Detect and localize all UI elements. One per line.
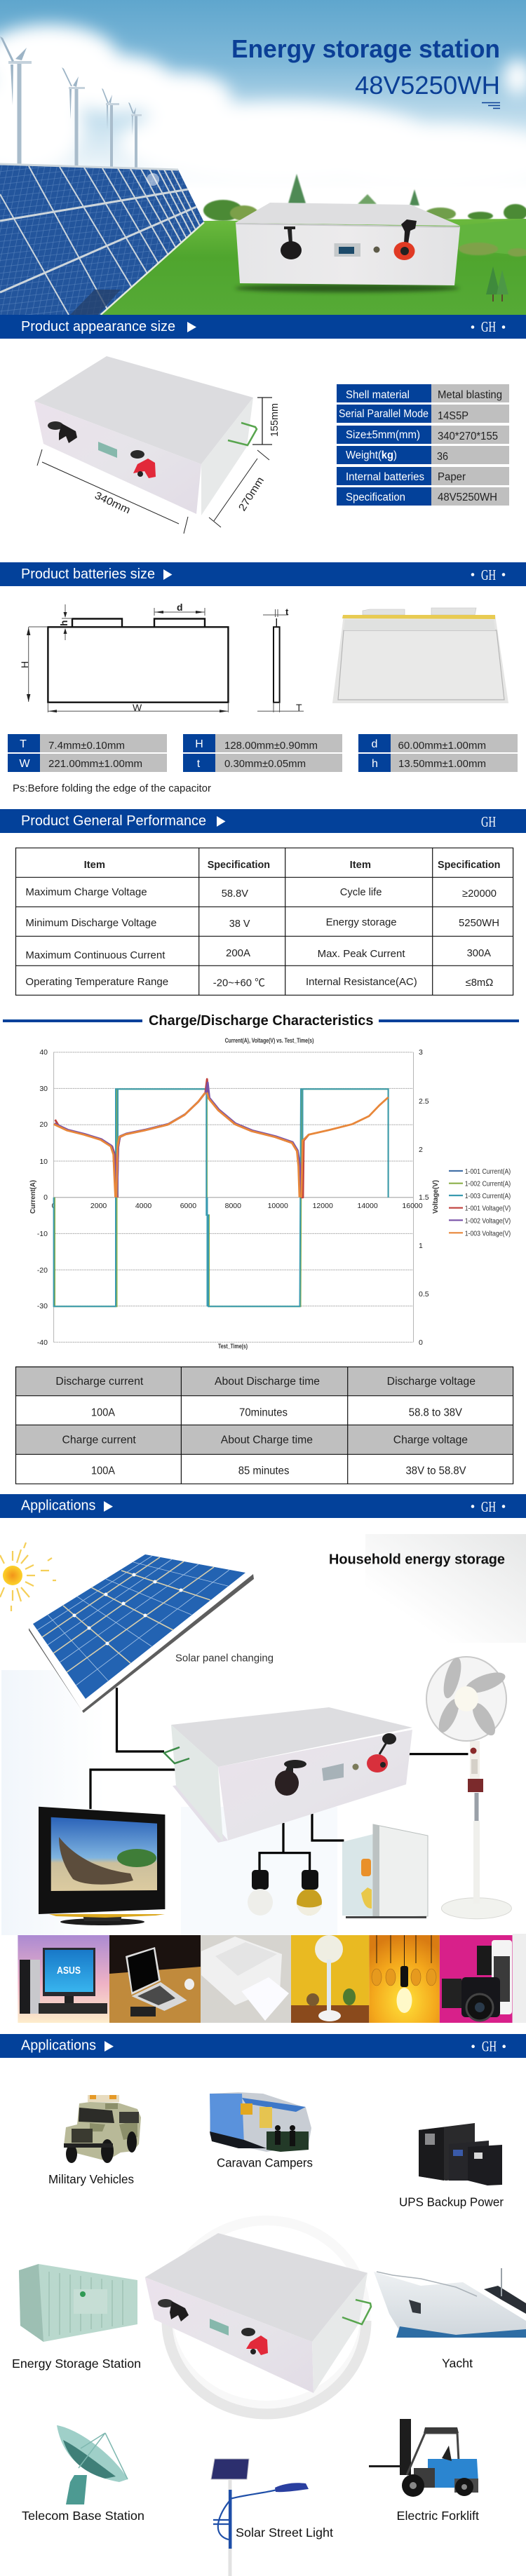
right axis: 2 xyxy=(419,1146,423,1154)
handle xyxy=(228,423,257,445)
chart legend: 1-002 Current(A) xyxy=(465,1180,511,1188)
photo: camera and phones xyxy=(440,1935,513,2023)
photo: laptop on desk xyxy=(109,1935,201,2023)
chart legend: 1-002 Voltage(V) xyxy=(465,1216,511,1225)
heading: Household energy storage xyxy=(329,1552,505,1568)
panel: household energy storage xyxy=(0,1534,526,2023)
heading: charge discharge: Charge/Discharge Characteristics xyxy=(149,1012,373,1029)
decorative lines icon xyxy=(482,102,500,108)
x axis labels: 10000 xyxy=(268,1202,288,1210)
dimension lines xyxy=(37,398,272,534)
left connector xyxy=(48,421,77,443)
solar panel xyxy=(29,1554,254,1713)
tv screen xyxy=(51,1817,157,1891)
dimension table: h xyxy=(372,758,378,770)
section banner: applications 2: Applications xyxy=(21,2038,96,2053)
white bulb xyxy=(248,1870,273,1916)
x axis labels xyxy=(52,1202,423,1210)
charge time table: Charge voltage xyxy=(393,1434,468,1446)
label: telecom base station: Telecom Base Station xyxy=(22,2509,144,2523)
performance table: ≤8mΩ xyxy=(466,977,493,989)
center battery xyxy=(145,2233,371,2393)
label: solar street light: Solar Street Light xyxy=(236,2526,333,2540)
section banner: batteries size xyxy=(0,562,526,586)
cell photo xyxy=(332,608,508,703)
performance table: Max. Peak Current xyxy=(318,948,405,960)
section banner: applications: GH xyxy=(481,1498,496,1515)
section banner: appearance size xyxy=(0,315,526,339)
performance table: 200A xyxy=(226,947,250,959)
panel nodes xyxy=(73,1573,182,1645)
left black connector xyxy=(281,226,302,259)
label T: T xyxy=(296,702,302,713)
x axis labels: 12000 xyxy=(313,1202,333,1210)
yellow bulb xyxy=(297,1870,322,1916)
cabinet top xyxy=(235,203,460,226)
x axis labels: 14000 xyxy=(357,1202,378,1210)
black connector xyxy=(158,2299,189,2321)
dimension table: 128.00mm±0.90mm xyxy=(224,740,318,752)
section banner: general performance: GH xyxy=(481,813,496,830)
television xyxy=(39,1807,165,1925)
pole and base xyxy=(441,1741,511,1919)
charge time table: 58.8 to 38V xyxy=(409,1406,463,1418)
fridge interior xyxy=(342,1834,373,1916)
left axis: 0 xyxy=(43,1193,48,1202)
right axis: 1.5 xyxy=(419,1193,429,1202)
x axis labels: 2000 xyxy=(90,1202,107,1210)
right axis: 0.5 xyxy=(419,1290,429,1299)
note: Ps:Before folding the edge of the capacitor xyxy=(13,782,211,794)
spec table: product: Specification xyxy=(346,492,405,503)
red connector xyxy=(394,219,417,260)
label: electric forklift: Electric Forklift xyxy=(397,2509,479,2523)
label h: h xyxy=(58,620,69,626)
panel surface xyxy=(33,1554,245,1699)
distant hill xyxy=(456,219,526,256)
sun icon xyxy=(0,1543,56,1611)
grass field xyxy=(100,219,526,315)
spec table: product: 14S5P xyxy=(438,410,468,422)
performance table: Operating Temperature Range xyxy=(25,976,168,988)
charge time table: 100A xyxy=(91,1465,116,1477)
label H: H xyxy=(19,661,30,668)
bottom flange xyxy=(173,1784,228,1843)
bushes on hill xyxy=(459,243,526,257)
panel grid xyxy=(37,1556,229,1686)
dimension table: T xyxy=(20,738,27,750)
charge time table: 85 minutes xyxy=(238,1465,290,1477)
panel frame xyxy=(29,1554,254,1713)
dimension table: 221.00mm±1.00mm xyxy=(48,759,142,770)
section banner: general performance xyxy=(0,809,526,833)
cell front diagram xyxy=(19,602,228,713)
section banner: batteries size: Product batteries size xyxy=(21,567,155,582)
tv neck xyxy=(83,1914,122,1921)
label t: t xyxy=(285,606,289,617)
label: ups backup power: UPS Backup Power xyxy=(399,2195,504,2209)
right axis: 2.5 xyxy=(419,1097,429,1106)
charge time table: Discharge current xyxy=(55,1376,144,1388)
section banner: applications: Applications xyxy=(21,1498,95,1513)
product photo with dimensions xyxy=(34,356,281,534)
spec table: product: Serial Parallel Mode xyxy=(339,408,429,420)
small trees xyxy=(486,266,508,301)
mini fridge xyxy=(342,1824,428,1918)
sky background xyxy=(0,0,526,315)
photo strip xyxy=(18,1934,526,2023)
box right side xyxy=(201,398,253,515)
left axis xyxy=(37,1048,48,1347)
label 270mm: 270mm xyxy=(236,475,267,513)
x axis labels: 16000 xyxy=(402,1202,423,1210)
ring behind battery xyxy=(167,2221,366,2414)
dimension table: H xyxy=(195,738,203,750)
photo: desktop computer: ASUS xyxy=(57,1965,81,1977)
grey corner backdrop xyxy=(365,1534,526,1643)
energy storage container xyxy=(19,2264,137,2342)
label: energy storage station: Energy Storage Station xyxy=(12,2357,141,2371)
photo: fan in yellow room xyxy=(291,1935,369,2023)
spec table: product: 48V5250WH xyxy=(438,492,497,503)
military vehicle xyxy=(64,2095,141,2163)
red connector xyxy=(241,2328,268,2355)
label: solar panel changing: Solar panel changing xyxy=(175,1652,274,1664)
x axis title: Test_Time(s) xyxy=(218,1343,248,1350)
charge time table xyxy=(15,1367,513,1484)
spec table: product: Weight(kg) xyxy=(346,449,397,461)
panel frame lines xyxy=(0,164,204,315)
line chart xyxy=(29,1037,511,1350)
clouds xyxy=(0,25,526,191)
dimension arrows xyxy=(27,611,228,712)
folded edge xyxy=(344,620,495,630)
pale cloud backdrops xyxy=(1,1670,337,1935)
spec table: product: 36 xyxy=(437,451,448,463)
spec table: product: Paper xyxy=(438,471,466,483)
yellow tape xyxy=(342,615,495,619)
dimension table: 60.00mm±1.00mm xyxy=(398,740,486,752)
ground shadow xyxy=(235,284,459,292)
dimension table: 0.30mm±0.05mm xyxy=(224,759,306,770)
photo: printer xyxy=(201,1935,291,2023)
left axis: -10 xyxy=(37,1230,48,1238)
handle xyxy=(342,2300,371,2324)
section banner: applications 2: GH xyxy=(482,2038,497,2055)
x axis labels: 6000 xyxy=(180,1202,196,1210)
charge time table: Charge current xyxy=(62,1434,136,1446)
right axis title: Voltage(V) xyxy=(432,1180,440,1214)
palm trees xyxy=(117,1849,156,1867)
cell side diagram xyxy=(257,606,304,713)
tv stand xyxy=(60,1918,144,1925)
performance table: Item xyxy=(350,860,371,871)
central battery xyxy=(164,1707,412,1843)
performance table: Specification xyxy=(208,860,270,871)
inner cell xyxy=(338,630,504,700)
label d: d xyxy=(177,602,183,613)
performance table: Item xyxy=(84,860,105,871)
heading: charge discharge xyxy=(3,1012,519,1029)
performance table: Specification xyxy=(438,860,500,871)
red connector xyxy=(367,1733,396,1772)
performance table: 38 V xyxy=(229,918,250,930)
panel surface xyxy=(0,164,204,315)
box front xyxy=(34,401,201,514)
box left xyxy=(171,1725,223,1842)
left axis: 30 xyxy=(39,1085,48,1093)
charge time table: 70minutes xyxy=(239,1406,288,1418)
box top xyxy=(34,356,253,464)
caravan camper xyxy=(210,2092,311,2152)
section banner: appearance size: Product appearance size xyxy=(21,319,175,334)
subtitle: 48V5250WH xyxy=(355,71,500,100)
fridge food xyxy=(361,1859,372,1909)
boat picture xyxy=(59,1837,133,1885)
chart legend: 1-003 Voltage(V) xyxy=(465,1229,511,1238)
spec table: product: Internal batteries xyxy=(346,471,424,483)
left axis: 40 xyxy=(39,1048,48,1057)
dimension table: 7.4mm±0.10mm xyxy=(48,740,125,752)
current series xyxy=(54,1089,389,1306)
black connector xyxy=(275,1760,306,1796)
telecom dish xyxy=(57,2425,128,2504)
spec table: product: Metal blasting xyxy=(438,389,502,401)
charge time table: About Charge time xyxy=(221,1434,313,1446)
light bulbs xyxy=(248,1870,322,1916)
dimension table: W xyxy=(19,758,30,770)
solar panel array xyxy=(0,164,204,315)
section banner: batteries size: GH xyxy=(481,567,496,583)
box top xyxy=(171,1707,412,1767)
grid xyxy=(54,1052,414,1342)
UPS units xyxy=(419,2123,502,2185)
label W: W xyxy=(133,702,142,713)
front xyxy=(145,2277,313,2393)
label: military vehicles: Military Vehicles xyxy=(48,2172,134,2186)
chart legend xyxy=(449,1167,511,1238)
charge time table: 100A xyxy=(91,1406,116,1418)
section banner: applications 2 xyxy=(0,2034,526,2058)
lens flare xyxy=(147,173,159,186)
label 155mm: 155mm xyxy=(269,403,281,437)
underside shadow panels xyxy=(70,290,121,315)
knob xyxy=(352,1764,359,1770)
stand fan xyxy=(426,1655,511,1919)
handle xyxy=(164,1747,189,1763)
tv yellow trim xyxy=(49,1914,165,1918)
chart legend: 1-001 Voltage(V) xyxy=(465,1205,511,1213)
x axis labels: 4000 xyxy=(135,1202,151,1210)
x axis labels: 0 xyxy=(52,1202,56,1210)
electric forklift xyxy=(369,2419,478,2497)
horizon trees and bushes xyxy=(203,174,526,221)
right axis: 1 xyxy=(419,1242,423,1250)
performance table: Energy storage xyxy=(326,916,397,928)
voltage series xyxy=(54,1079,389,1198)
left axis: -20 xyxy=(37,1266,48,1275)
pouch body xyxy=(332,615,508,703)
top xyxy=(145,2233,367,2342)
fan head xyxy=(426,1655,508,1741)
photo: desktop computer xyxy=(18,1935,109,2023)
chart legend: 1-001 Current(A) xyxy=(465,1167,511,1176)
spec table: product: Shell material xyxy=(346,389,410,401)
dimension table: 13.50mm±1.00mm xyxy=(398,759,486,770)
display xyxy=(322,1763,344,1781)
side xyxy=(312,2273,367,2393)
charge time table: Discharge voltage xyxy=(387,1376,476,1388)
fridge door xyxy=(373,1824,428,1918)
section banner: general performance: Product General Performance xyxy=(21,813,206,829)
charge time table: About Discharge time xyxy=(215,1376,320,1388)
performance table: 300A xyxy=(467,947,491,959)
performance table: 58.8V xyxy=(222,888,248,900)
display xyxy=(334,243,360,257)
section banner: appearance size: GH xyxy=(481,318,496,335)
left axis: -30 xyxy=(37,1302,48,1310)
dimension table: t xyxy=(197,758,201,770)
fridge base xyxy=(346,1916,426,1918)
section banner: applications xyxy=(0,1494,526,1518)
yacht xyxy=(374,2268,526,2338)
axis titles: Current(A) xyxy=(29,1180,37,1214)
panel thick edge xyxy=(29,1574,254,1713)
left axis: 10 xyxy=(39,1158,48,1166)
pouch tabs xyxy=(363,608,476,615)
label 340mm: 340mm xyxy=(93,489,132,516)
performance table: 5250WH xyxy=(459,917,499,929)
red connector xyxy=(130,450,156,478)
solar street light xyxy=(211,2459,309,2576)
connecting wires xyxy=(90,1688,468,1870)
panel: application scenarios xyxy=(12,2092,526,2576)
performance table: ≥20000 xyxy=(462,888,497,900)
display xyxy=(98,442,117,458)
charge time table: 38V to 58.8V xyxy=(405,1465,466,1477)
label: caravan campers: Caravan Campers xyxy=(217,2156,313,2170)
photo end strip xyxy=(513,1934,526,2023)
cabinet front xyxy=(236,223,460,285)
performance table: Maximum Continuous Current xyxy=(25,949,166,961)
performance table: Minimum Discharge Voltage xyxy=(25,917,156,929)
spec table: product xyxy=(337,384,509,506)
x axis labels: 8000 xyxy=(225,1202,241,1210)
spec table: product: Size±5mm(mm) xyxy=(346,429,420,441)
wind turbines xyxy=(0,36,142,168)
right axis xyxy=(419,1048,429,1347)
chart title: Current(A), Voltage(V) vs. Test_Time(s) xyxy=(225,1037,313,1044)
panel: hero banner xyxy=(0,0,526,315)
display xyxy=(210,2319,229,2336)
battery cabinet xyxy=(235,203,460,292)
performance table: -20~+60 ℃ xyxy=(213,977,265,989)
left axis: -40 xyxy=(37,1338,48,1347)
knob xyxy=(373,247,380,252)
label: yacht: Yacht xyxy=(442,2357,473,2371)
performance table: Maximum Charge Voltage xyxy=(25,886,147,898)
dimension table xyxy=(8,734,518,772)
left axis: 20 xyxy=(39,1120,48,1129)
performance table xyxy=(15,848,513,995)
photo: hanging bulbs xyxy=(369,1935,440,2023)
door edge xyxy=(373,1824,379,1918)
tv bezel xyxy=(39,1807,165,1914)
performance table: Internal Resistance(AC) xyxy=(306,976,417,988)
right axis: 3 xyxy=(419,1048,423,1057)
dimension table: d xyxy=(372,738,377,750)
title: Energy storage station xyxy=(231,34,500,63)
right axis: 0 xyxy=(419,1338,423,1347)
performance table: Cycle life xyxy=(340,886,382,898)
spec table: product: 340*270*155 xyxy=(438,431,498,442)
chart legend: 1-003 Current(A) xyxy=(465,1192,511,1200)
box front xyxy=(218,1730,412,1841)
